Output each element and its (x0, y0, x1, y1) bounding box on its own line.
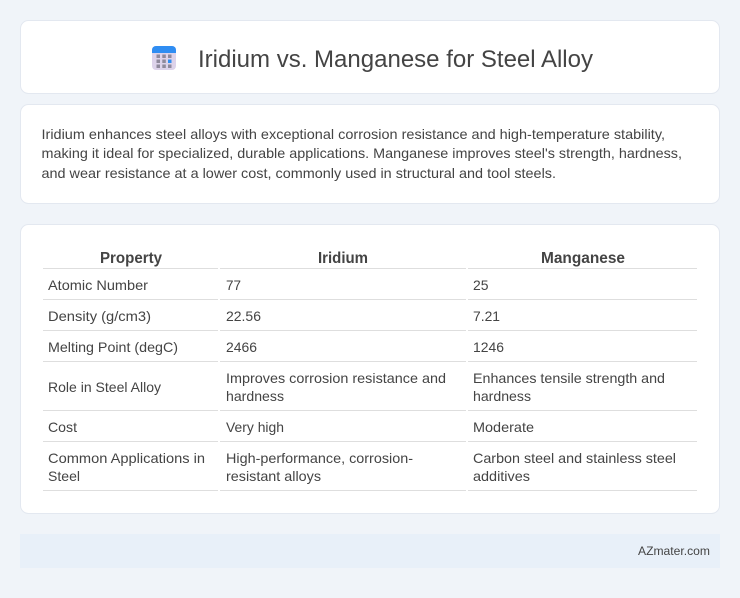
row: common applications: Common Applications in (48, 450, 205, 466)
row: common applications (48, 450, 676, 484)
summary text: Iridium enhances steel alloys with exceptional corrosion resistance and high-temperature stability, (42, 126, 665, 142)
summary text: and wear resistance at a lower cost, commonly used in structural and tool steels. (42, 165, 556, 181)
icon: calendar (152, 46, 176, 70)
footer (20, 534, 720, 568)
panel: comparison table (20, 224, 720, 514)
footer credit: AZmater.com (638, 544, 710, 558)
summary text: making it ideal for specialized, durable applications. Manganese improves steel's strength, hardness, (42, 145, 682, 161)
table header row: Property (100, 250, 162, 267)
row: common applications: additives (473, 468, 530, 484)
table header row (100, 250, 625, 267)
row: common applications: resistant alloys (226, 468, 321, 484)
row: role in steel alloy: hardness (226, 388, 284, 404)
row: melting point: 1246 (473, 339, 504, 355)
row: role in steel alloy: Role in Steel Alloy (48, 379, 161, 395)
row: density (48, 308, 500, 324)
row: cost (48, 419, 534, 435)
table header row: Iridium (318, 250, 368, 267)
row: atomic number: 77 (226, 277, 241, 293)
row: role in steel alloy (48, 370, 665, 404)
table header row: Manganese (541, 250, 625, 267)
panel: summary (20, 104, 720, 204)
row: density: 22.56 (226, 308, 261, 324)
row: cost: Very high (226, 419, 284, 435)
row: common applications: Steel (48, 468, 80, 484)
row: atomic number (48, 277, 489, 293)
row: density: 7.21 (473, 308, 500, 324)
row: melting point (48, 339, 504, 355)
row: melting point: 2466 (226, 339, 257, 355)
row: role in steel alloy: Enhances tensile strength and (473, 370, 665, 386)
row: melting point: Melting Point (degC) (48, 339, 178, 355)
summary text (42, 126, 682, 181)
row: atomic number: 25 (473, 277, 489, 293)
row: role in steel alloy: hardness (473, 388, 531, 404)
row: density: Density (g/cm3) (48, 308, 151, 324)
row: cost: Moderate (473, 419, 534, 435)
row: common applications: High-performance, corrosion- (226, 450, 413, 466)
heading: Iridium vs. Manganese for Steel Alloy (198, 46, 593, 73)
row: role in steel alloy: Improves corrosion resistance and (226, 370, 446, 386)
row: cost: Cost (48, 419, 77, 435)
panel: title (20, 20, 720, 94)
row: atomic number: Atomic Number (48, 277, 148, 293)
row: common applications: Carbon steel and stainless steel (473, 450, 676, 466)
